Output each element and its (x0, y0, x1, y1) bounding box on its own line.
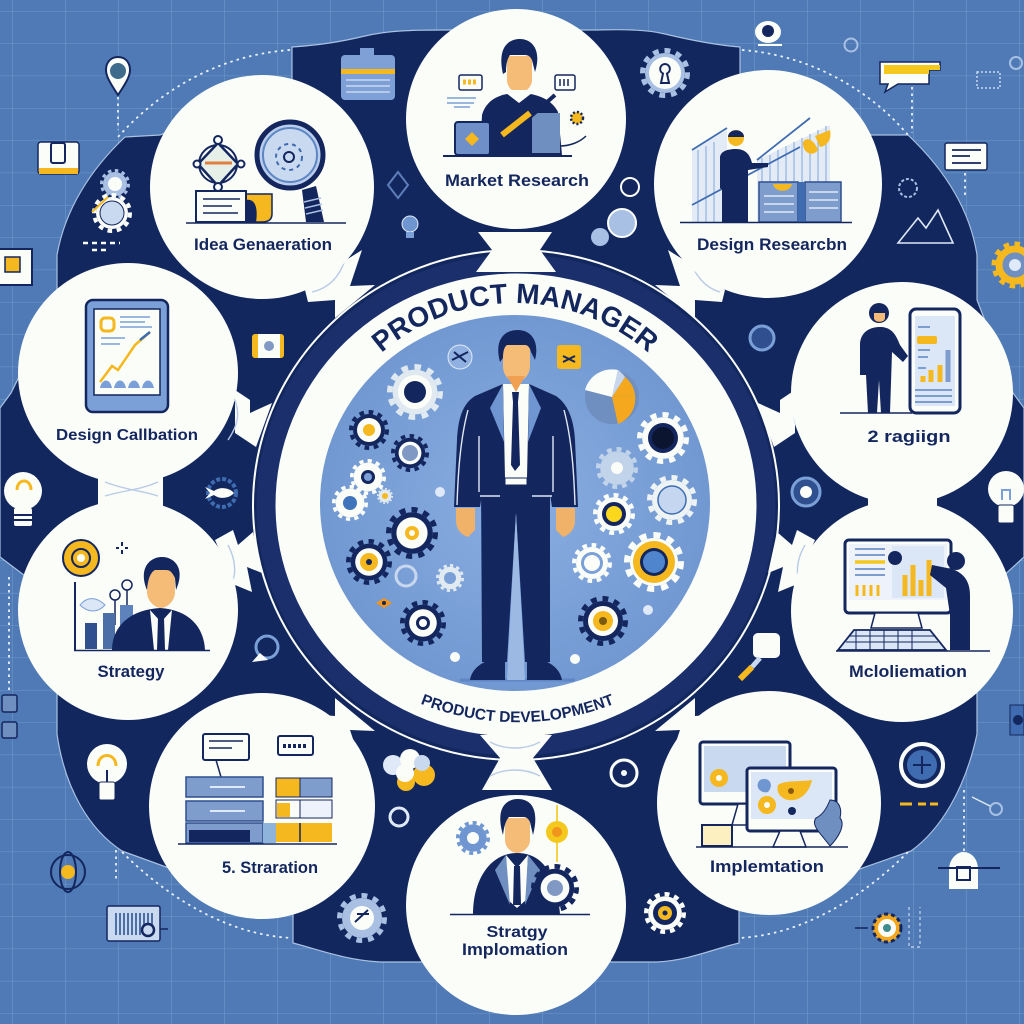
icon: atom (51, 852, 85, 892)
panel: design calibration (18, 263, 238, 483)
icon: magnifier and idea diagram (186, 122, 346, 223)
panel: situation (149, 693, 375, 919)
icon: top small badge (755, 21, 782, 45)
icon: keyhole gear (642, 50, 688, 96)
panel: centre hub (256, 232, 776, 790)
label line two: Implomation (462, 941, 568, 959)
icon: dash bulb (402, 216, 418, 238)
icon: person with phone (840, 303, 960, 413)
icon: yellow tag (252, 334, 284, 358)
icon: person presenting charts (680, 118, 852, 222)
panel: strategy implementation (406, 795, 626, 1015)
icon: person with laptop (443, 39, 586, 156)
icon: fish gear (205, 479, 236, 507)
icon: server stack and speech bubbles (178, 734, 337, 844)
label: Implemtation (710, 858, 824, 876)
icon: small gear (390, 808, 408, 826)
subheading: product development: PRODUCT DEVELOPMENT (421, 694, 612, 722)
ground shadow (460, 678, 575, 682)
icon: left bulb (4, 472, 42, 526)
panel: market research (406, 9, 626, 229)
icon: left card (0, 249, 32, 285)
pie chart (585, 369, 639, 424)
panel: strategy (18, 500, 238, 720)
icon: person and target (63, 540, 210, 650)
connector accent lines (105, 260, 930, 582)
icon: key tag (740, 633, 780, 679)
icon: two monitors and plant (696, 742, 848, 847)
label: Design Callbation (56, 427, 198, 444)
label: Idea Genaeration (194, 236, 332, 254)
heading: product manager: PRODUCT MANAGER (370, 284, 658, 352)
icon: map pin (106, 57, 130, 95)
icon: bottom-left bulb (87, 744, 127, 800)
icon: right node (972, 797, 1002, 815)
icon: box (38, 142, 79, 174)
right gears (557, 345, 694, 664)
white connector tabs (98, 250, 937, 766)
label: 2 ragiign (868, 428, 950, 446)
icon: diamond (388, 172, 408, 198)
icon: right gears (750, 326, 820, 506)
icon: mountain (898, 210, 953, 243)
shirt and tie (503, 384, 529, 478)
icon: double gears (83, 170, 130, 250)
icon: note card (945, 143, 987, 170)
icon: left locks (2, 695, 17, 738)
icon: right device (1010, 705, 1024, 735)
panel: programme (791, 282, 1013, 504)
figure: product manager (454, 330, 578, 680)
head (503, 345, 530, 382)
panel: implementation (657, 691, 881, 915)
label: Mcloliemation (849, 663, 967, 681)
panel: design research (654, 70, 882, 298)
legs (481, 480, 550, 662)
label: Design Researcbn (697, 235, 847, 254)
icon: small ring and grid (844, 38, 1022, 88)
shoes (470, 658, 562, 680)
icon: sun gear (899, 179, 917, 197)
icon: person and gears (450, 799, 590, 914)
panel: idea generation (150, 75, 374, 299)
icon: monitor, keyboard and person (836, 540, 990, 651)
hub outer hairline (253, 250, 779, 760)
icon: orange gear (855, 907, 920, 947)
label: Strategy (98, 663, 165, 681)
icon: small pale gears (591, 178, 639, 246)
icon: round seal (900, 744, 943, 804)
icon: yellow gear right (994, 244, 1024, 286)
icon: padlock arch (938, 852, 1000, 889)
icon: gear bottom (646, 894, 684, 932)
icon: navy gear bottom left (340, 896, 384, 940)
label: Stratgy (486, 924, 548, 941)
hands (456, 508, 575, 537)
jacket (454, 384, 578, 507)
inner blue disc (320, 315, 710, 691)
icon: briefcase (341, 48, 395, 100)
label: Market Research (445, 171, 589, 190)
label: 5. Straration (222, 859, 318, 877)
icon: tablet with chart (86, 300, 168, 412)
panel: implementation right (791, 500, 1013, 722)
icon: gear cluster (383, 749, 435, 791)
icon: right bulb (988, 471, 1024, 523)
left gears (334, 345, 472, 662)
icon: tool ring (252, 636, 278, 662)
icon: barcode card (107, 906, 168, 941)
icon: speech bubble (880, 62, 940, 92)
icon: ring right of bottom (611, 760, 637, 786)
